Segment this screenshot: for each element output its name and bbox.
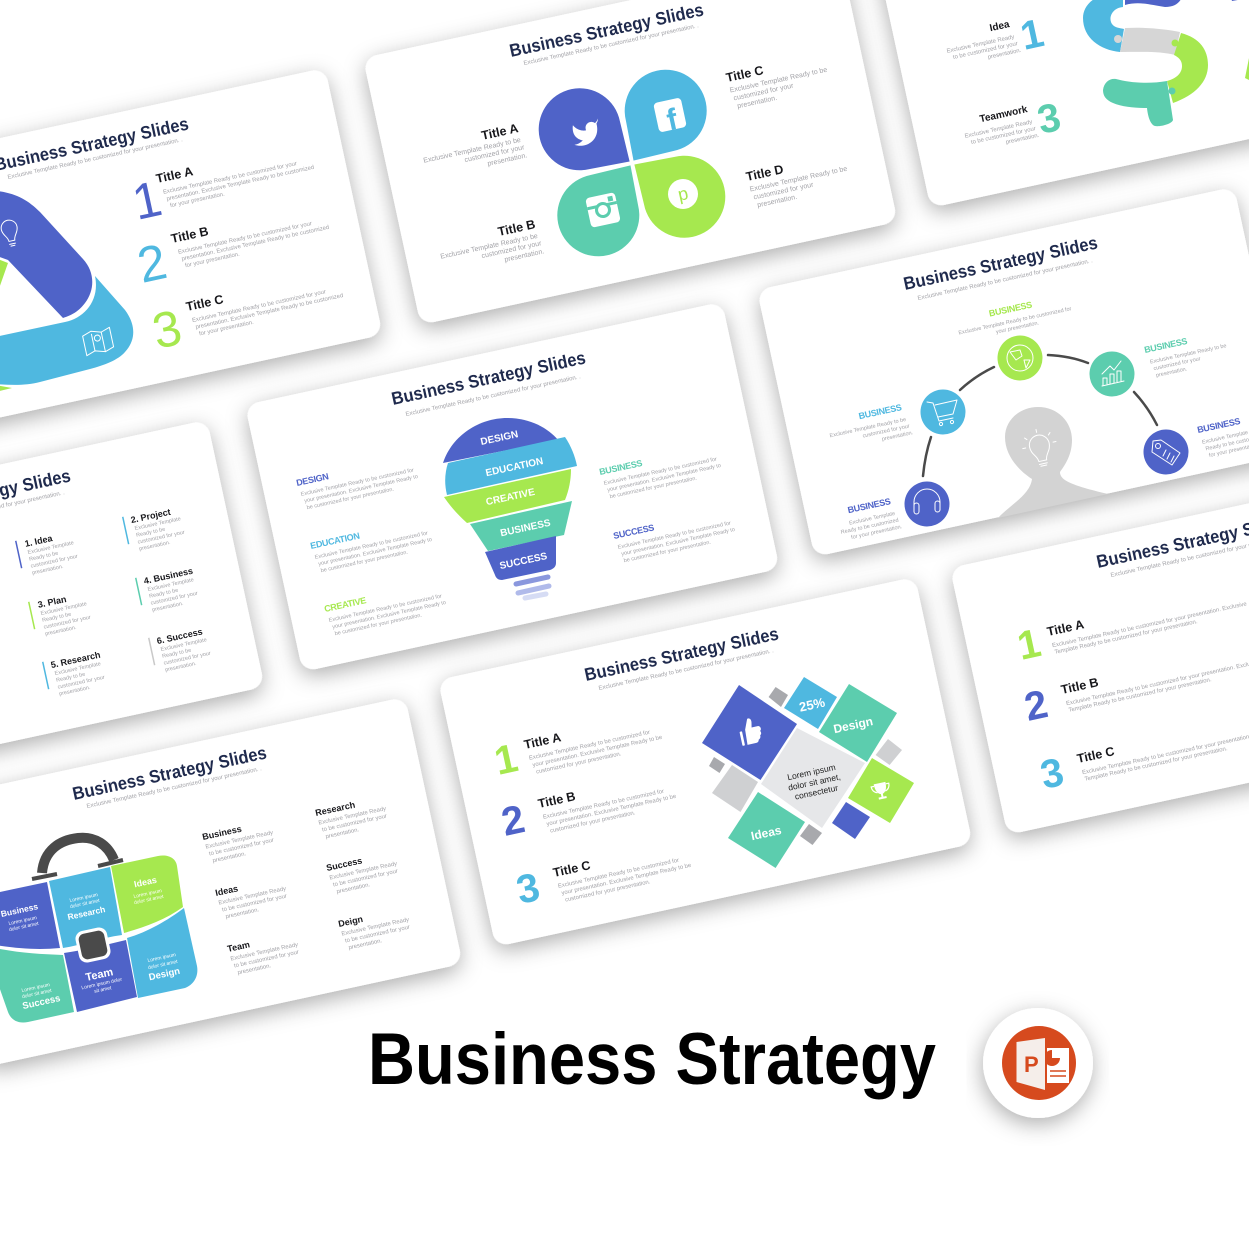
item: 4. Business: [135, 566, 200, 616]
item: 4. Business: presentation.: [152, 601, 184, 614]
item: Deign: Deign: [337, 914, 364, 929]
item: Title A: [155, 139, 316, 211]
panel: social petals slide: [363, 0, 898, 325]
briefcase diagram: dolor sit amet: [21, 988, 53, 1000]
label: left business: BUSINESS: [858, 402, 903, 421]
card background: [438, 577, 973, 947]
item: 3. Plan: [28, 590, 93, 640]
card background: [873, 0, 1249, 208]
number 3: 3: [513, 865, 544, 913]
briefcase diagram: Lorem ipsum dolor: [81, 977, 123, 991]
label: lower left business: [836, 495, 903, 543]
item: BUSINESS: BUSINESS: [598, 458, 643, 477]
panel: three titles slide: [950, 465, 1249, 835]
item: EDUCATION: Exclusive Template Ready to be customized for: [314, 530, 429, 561]
label: right business: [1143, 328, 1230, 380]
node: cart: [920, 390, 966, 434]
item: Title C: [185, 267, 345, 339]
item: DESIGN: [295, 453, 420, 512]
label: top business: BUSINESS: [988, 300, 1033, 319]
label: lower left business: Ready to be customized: [840, 518, 899, 536]
item: Title B: customized for your: [481, 240, 543, 260]
light bulb diagram: [443, 418, 577, 598]
item: 6. Success: 6. Success: [156, 626, 203, 646]
item: Title C: presentation. Exclusive Template Ready to be customized: [195, 293, 344, 331]
item: Title A: Exclusive Template Ready to be: [423, 137, 522, 165]
item: Idea: Exclusive Template Ready: [946, 34, 1015, 55]
item: Title D: [745, 149, 852, 210]
item: Business: presentation.: [212, 851, 247, 864]
item: Title B: [537, 768, 679, 836]
item: DESIGN: DESIGN: [295, 471, 329, 488]
item: 6. Success: customized for your: [163, 651, 212, 667]
item: Title A: for your presentation.: [170, 192, 226, 209]
item: Title B: Exclusive Template Ready to be customized for your: [178, 221, 313, 256]
briefcase diagram: Research: [67, 904, 106, 922]
item: Title D: customized for your: [753, 181, 815, 201]
label: lower left business: Exclusive Template: [849, 511, 896, 527]
item: Title A: presentation. Exclusive Template Ready to be customized: [166, 165, 315, 203]
slide subtitle: Exclusive Template Ready to be customized for your presentation. .: [7, 137, 184, 181]
item: Title A: presentation.: [487, 152, 528, 168]
item: 4. Business: customized for your: [150, 591, 199, 607]
item: Title C: your presentation. Exclusive Template Ready to be: [561, 863, 693, 897]
item: EDUCATION: your presentation. Exclusive Template Ready to: [318, 537, 433, 567]
item: Ideas: to be customized for your: [222, 894, 288, 913]
briefcase diagram: Lorem ipsum: [8, 915, 38, 927]
item: Title B: Template Ready to be customized for your presentation.: [1068, 677, 1212, 714]
node: globe: [998, 336, 1042, 380]
briefcase diagram: dolor sit amet: [8, 921, 40, 933]
item: Title A: [1046, 583, 1249, 657]
item: Title C: Template Ready to be customized for your presentation.: [1084, 746, 1228, 783]
squares diagram: 25%: [798, 694, 827, 715]
item: 3. Plan: customized for your: [43, 615, 92, 631]
item: 2. Project: [122, 505, 187, 555]
briefcase diagram: [0, 838, 197, 1023]
item: 4. Business: Exclusive Template: [147, 577, 194, 593]
item: Team: to be customized for your: [234, 950, 300, 969]
briefcase diagram: sit amet: [94, 985, 113, 995]
label: far right business: Exclusive Template: [1202, 430, 1249, 446]
item: Research: Research: [314, 800, 356, 818]
item: Deign: Exclusive Template Ready: [341, 917, 410, 938]
label: top business: [955, 292, 1074, 343]
squares diagram: dolor sit amet,: [787, 772, 842, 793]
number 3: 3: [147, 299, 187, 360]
icon: instagram: [585, 192, 621, 228]
squares diagram: Design: [832, 714, 874, 736]
briefcase diagram: Lorem ipsum: [69, 892, 99, 904]
item: BUSINESS: Exclusive Template Ready to be customized for: [603, 456, 718, 487]
item: 1. Idea: Exclusive Template: [27, 540, 74, 556]
item: SUCCESS: Exclusive Template Ready to be customized for: [617, 520, 732, 551]
card background: [0, 697, 463, 1067]
item: 5. Research: Exclusive Template: [54, 661, 101, 677]
item: Ideas: Exclusive Template Ready: [218, 886, 287, 907]
icon: facebook: f: [664, 103, 681, 137]
icon: PowerPoint badge: [983, 1008, 1093, 1118]
card background: [757, 187, 1249, 557]
item: Title D: presentation.: [757, 194, 798, 209]
label: top business: Exclusive Template Ready to be customized for: [958, 306, 1072, 336]
label: far right business: [1196, 412, 1249, 460]
item: Title C: customized for your: [733, 82, 795, 102]
item: CREATIVE: Exclusive Template Ready to be customized for: [328, 593, 443, 624]
slide subtitle: Exclusive Template Ready to be customized for your presentation. .: [917, 258, 1094, 302]
label: right business: presentation.: [1155, 366, 1188, 379]
item: 5. Research: 5. Research: [50, 650, 101, 670]
label: left business: customized for your: [862, 423, 910, 440]
card background: [0, 420, 265, 790]
light bulb diagram: DESIGN: [480, 429, 519, 448]
item: 3. Plan: 3. Plan: [37, 594, 67, 610]
icon: trophy: [871, 781, 892, 801]
panel: puzzle S slide: [873, 0, 1249, 208]
item: SUCCESS: [612, 506, 737, 565]
item: DESIGN: your presentation. Exclusive Template Ready to: [304, 474, 419, 504]
squares diagram: Lorem ipsum: [786, 762, 836, 782]
number 1: 1: [491, 736, 522, 784]
item: Title C: Title C: [1076, 744, 1116, 766]
item: Business: [201, 817, 277, 865]
node: headphones: [904, 482, 950, 526]
slide subtitle: Exclusive Template Ready to be customized for your presentation. .: [86, 766, 263, 810]
item: Title C: customized for your presentation.: [565, 879, 651, 904]
briefcase diagram: Design: [148, 966, 181, 983]
item: Title C: [1076, 710, 1249, 784]
item: 5. Research: customized for your: [57, 675, 106, 691]
item: Title C: [725, 50, 832, 111]
icon: pinterest: p: [676, 183, 690, 205]
item: 6. Success: presentation.: [165, 661, 197, 674]
item: Team: presentation.: [237, 963, 272, 976]
item: 5. Research: [42, 650, 107, 700]
item: 1. Idea: presentation.: [32, 564, 64, 577]
squares diagram: consectetur: [794, 783, 839, 802]
item: 2. Project: 2. Project: [130, 507, 172, 525]
item: Success: Exclusive Template Ready: [329, 861, 398, 882]
number 1: 1: [1014, 621, 1045, 669]
number 2: 2: [1021, 682, 1052, 730]
item: Title B: Title B: [497, 217, 537, 239]
label: left business: Exclusive Template Ready to be: [829, 417, 907, 439]
item: Ideas: Ideas: [214, 883, 239, 898]
item: Business: to be customized for your: [209, 838, 275, 857]
item: Team: Exclusive Template Ready: [230, 942, 299, 963]
item: Title C: [552, 837, 694, 905]
card background: [0, 68, 383, 438]
item: 2. Project: presentation.: [139, 540, 171, 553]
item: Title B: [436, 217, 545, 277]
item: BUSINESS: your presentation. Exclusive Template Ready to: [607, 463, 722, 493]
item: Title B: Exclusive Template Ready to be customized for: [543, 789, 665, 821]
item: Business: Business: [201, 824, 243, 842]
item: Title A: Title A: [480, 121, 520, 143]
label: lower left business: for your presentation.: [851, 524, 903, 541]
item: Title B: [1060, 641, 1249, 715]
item: CREATIVE: your presentation. Exclusive Template Ready to: [332, 600, 447, 630]
item: EDUCATION: be customized for your presentation.: [320, 549, 409, 574]
item: Deign: presentation.: [348, 938, 383, 951]
item: Title C: Exclusive Template Ready to be customized for: [558, 858, 680, 890]
petal diagram: [531, 62, 733, 264]
briefcase diagram: Lorem ipsum: [147, 952, 177, 964]
puzzle S diagram: [1083, 0, 1249, 126]
item: 3. Plan: presentation.: [45, 625, 77, 638]
item: Success: Success: [325, 855, 363, 873]
number 3: 3: [1034, 95, 1065, 143]
item: Teamwork: Exclusive Template Ready: [964, 119, 1033, 140]
panel: arc of circles slide: [757, 187, 1249, 557]
item: Success: [325, 848, 401, 896]
panel: light bulb slide: [245, 302, 780, 672]
briefcase diagram: dolor sit amet: [69, 898, 101, 910]
item: 2. Project: Ready to be: [136, 527, 166, 539]
item: Title C: Title C: [725, 63, 765, 85]
number 1: 1: [127, 170, 167, 231]
slide heading: Business Strategy Slides: [583, 624, 780, 685]
item: 4. Business: Ready to be: [149, 588, 179, 600]
icon: bulb: [1019, 426, 1060, 469]
item: Business: Exclusive Template Ready: [205, 830, 274, 851]
icon: PowerPoint badge: P: [1024, 1052, 1039, 1077]
panel: triangle slide: [0, 68, 383, 438]
item: Research: Exclusive Template Ready: [318, 806, 387, 827]
panel: briefcase slide: [0, 697, 463, 1067]
item: Title B: Title B: [537, 789, 577, 811]
briefcase diagram: Lorem ipsum: [133, 888, 163, 900]
item: Title A: your presentation. Exclusive Template Ready to be: [532, 735, 664, 769]
item: Research: [314, 793, 390, 841]
triangle diagram: [0, 190, 133, 392]
item: Deign: to be customized for your: [345, 925, 411, 944]
squares diagram: [702, 677, 914, 868]
icon: map: [82, 327, 114, 356]
number 3: 3: [1037, 750, 1068, 798]
connector arcs: [923, 355, 1157, 476]
icon: light bulb: [0, 219, 21, 247]
item: Title C: presentation.: [737, 95, 778, 110]
item: CREATIVE: CREATIVE: [323, 595, 367, 614]
item: Deign: [337, 904, 413, 952]
item: Title B: Title B: [170, 224, 210, 246]
item: Title A: customized for your presentation.: [536, 751, 622, 776]
item: Teamwork: to be customized for your: [970, 126, 1036, 146]
briefcase diagram: Team: [84, 966, 114, 984]
item: Idea: [943, 18, 1022, 69]
item: 5. Research: Ready to be: [56, 672, 86, 684]
label: lower left business: BUSINESS: [847, 496, 892, 515]
briefcase diagram: Lorem ipsum: [21, 982, 51, 994]
item: Title B: presentation.: [504, 248, 545, 264]
number 2: 2: [132, 233, 172, 294]
label: far right business: BUSINESS: [1196, 416, 1241, 435]
node: tag: [1144, 430, 1188, 474]
icon: thumbs up: [737, 716, 764, 746]
item: Title B: Title B: [1060, 675, 1100, 697]
item: 1. Idea: customized for your: [30, 554, 79, 570]
label: right business: customized for your: [1153, 356, 1201, 372]
item: 5. Research: presentation.: [59, 685, 91, 698]
briefcase diagram: Business: [0, 901, 39, 919]
item: Title A: [523, 709, 665, 777]
light bulb diagram: SUCCESS: [499, 551, 549, 572]
item: Title A: Exclusive Template Ready to be customized for your presentation. Exclusive: [1052, 601, 1248, 649]
main title: Business Strategy: [368, 1019, 936, 1100]
item: Success: to be customized for your: [333, 869, 399, 888]
item: Title D: Exclusive Template Ready to be: [749, 166, 848, 193]
item: 1. Idea: [15, 529, 80, 579]
number 1: 1: [1017, 11, 1048, 59]
item: EDUCATION: [309, 516, 434, 575]
briefcase diagram: dolor sit amet: [133, 894, 165, 906]
slide subtitle: Exclusive Template Ready to be customized for your presentation. .: [523, 23, 700, 67]
person silhouette: [998, 407, 1108, 518]
slide heading: Business Strategy Slides: [902, 233, 1099, 294]
item: Research: to be customized for your: [322, 814, 388, 833]
item: DESIGN: be customized for your presentation.: [306, 486, 395, 511]
item: SUCCESS: SUCCESS: [612, 522, 655, 541]
light bulb diagram: BUSINESS: [499, 518, 552, 539]
item: Title B: [170, 199, 331, 271]
item: DESIGN: Exclusive Template Ready to be customized for: [300, 467, 415, 498]
item: Idea: Idea: [989, 19, 1011, 34]
briefcase diagram: Success: [21, 993, 61, 1012]
item: Title A: Exclusive Template Ready to be customized for: [529, 730, 651, 762]
item: Idea: presentation.: [987, 48, 1022, 61]
item: BUSINESS: [598, 442, 723, 501]
slide heading: Business Strategy Slides: [71, 743, 268, 804]
light bulb diagram: EDUCATION: [485, 456, 544, 479]
item: Title A: Template Ready to be customized for your presentation.: [1054, 619, 1198, 656]
item: Title C: Title C: [185, 292, 225, 314]
item: 4. Business: 4. Business: [143, 566, 194, 586]
item: Idea: to be customized for your: [952, 41, 1018, 61]
item: BUSINESS: be customized for your presentation.: [609, 475, 698, 500]
label: right business: BUSINESS: [1143, 336, 1188, 355]
item: Title A: Exclusive Template Ready to be customized for your: [163, 161, 298, 196]
item: 1. Idea: 1. Idea: [24, 533, 54, 549]
item: Title A: [419, 121, 528, 181]
item: Research: presentation.: [325, 827, 360, 840]
item: Title A: Title A: [1046, 617, 1085, 639]
item: Title B: presentation. Exclusive Template Ready to be customized: [181, 225, 330, 263]
item: Teamwork: presentation.: [1005, 133, 1040, 146]
item: 6. Success: [148, 626, 213, 676]
item: Title B: for your presentation.: [185, 252, 241, 269]
item: 1. Idea: Ready to be: [29, 551, 59, 563]
item: Title A: Title A: [155, 164, 194, 186]
item: Title B: customized for your presentation.: [550, 810, 636, 835]
card background: [950, 465, 1249, 835]
item: 6. Success: Ready to be: [162, 648, 192, 660]
node: chart: [1090, 352, 1134, 396]
icon: twitter: [570, 118, 603, 147]
item: 2. Project: customized for your: [137, 530, 186, 546]
label: top business: your presentation.: [995, 320, 1040, 336]
item: Title C: Exclusive Template Ready to be: [729, 67, 828, 94]
item: Ideas: presentation.: [225, 907, 260, 920]
item: Team: [226, 929, 302, 977]
label: left business: [826, 401, 914, 453]
item: 2. Project: Exclusive Template: [134, 516, 181, 532]
item: Success: presentation.: [336, 882, 371, 895]
item: EDUCATION: EDUCATION: [309, 531, 360, 551]
card background: [245, 302, 780, 672]
item: 3. Plan: Ready to be: [42, 612, 72, 624]
item: Title D: Title D: [745, 162, 785, 184]
item: Title B: Exclusive Template Ready to be: [440, 233, 539, 261]
squares diagram: Ideas: [750, 823, 783, 843]
item: Ideas: [214, 873, 290, 921]
item: Title B: your presentation. Exclusive Template Ready to be: [546, 794, 678, 828]
item: Teamwork: [961, 103, 1040, 154]
slide subtitle: Exclusive Template Ready to be customized for your presentation. .: [405, 374, 582, 418]
card background: [363, 0, 898, 325]
item: Team: Team: [226, 939, 251, 954]
item: CREATIVE: [323, 579, 448, 638]
label: left business: presentation.: [881, 430, 914, 443]
item: Teamwork: Teamwork: [979, 104, 1029, 125]
label: right business: Exclusive Template Ready to be: [1150, 343, 1227, 366]
icon: facebook: [653, 97, 688, 139]
panel: six step list slide: [0, 420, 265, 790]
item: Title C: Title C: [552, 858, 592, 880]
item: 6. Success: Exclusive Template: [160, 637, 207, 653]
item: Title C: for your presentation.: [199, 320, 255, 337]
item: SUCCESS: be customized for your presentation.: [623, 539, 712, 564]
slide heading: Business Strategy Slides: [390, 348, 587, 409]
item: Title A: Title A: [523, 730, 562, 752]
panel: tilted squares slide: [438, 577, 973, 947]
item: CREATIVE: be customized for your presentation.: [334, 612, 423, 637]
briefcase diagram: Ideas: [133, 875, 158, 889]
item: 3. Plan: Exclusive Template: [40, 601, 87, 617]
item: SUCCESS: your presentation. Exclusive Template Ready to: [621, 527, 736, 557]
slide subtitle: Exclusive Template Ready to be customized for your presentation. .: [598, 648, 775, 692]
light bulb diagram: CREATIVE: [485, 487, 536, 508]
number 2: 2: [498, 797, 529, 845]
briefcase diagram: dolor sit amet: [147, 959, 179, 971]
item: Title C: Exclusive Template Ready to be customized for your: [192, 289, 327, 324]
item: Title A: customized for your: [464, 144, 526, 164]
icon: pinterest: [665, 176, 701, 212]
